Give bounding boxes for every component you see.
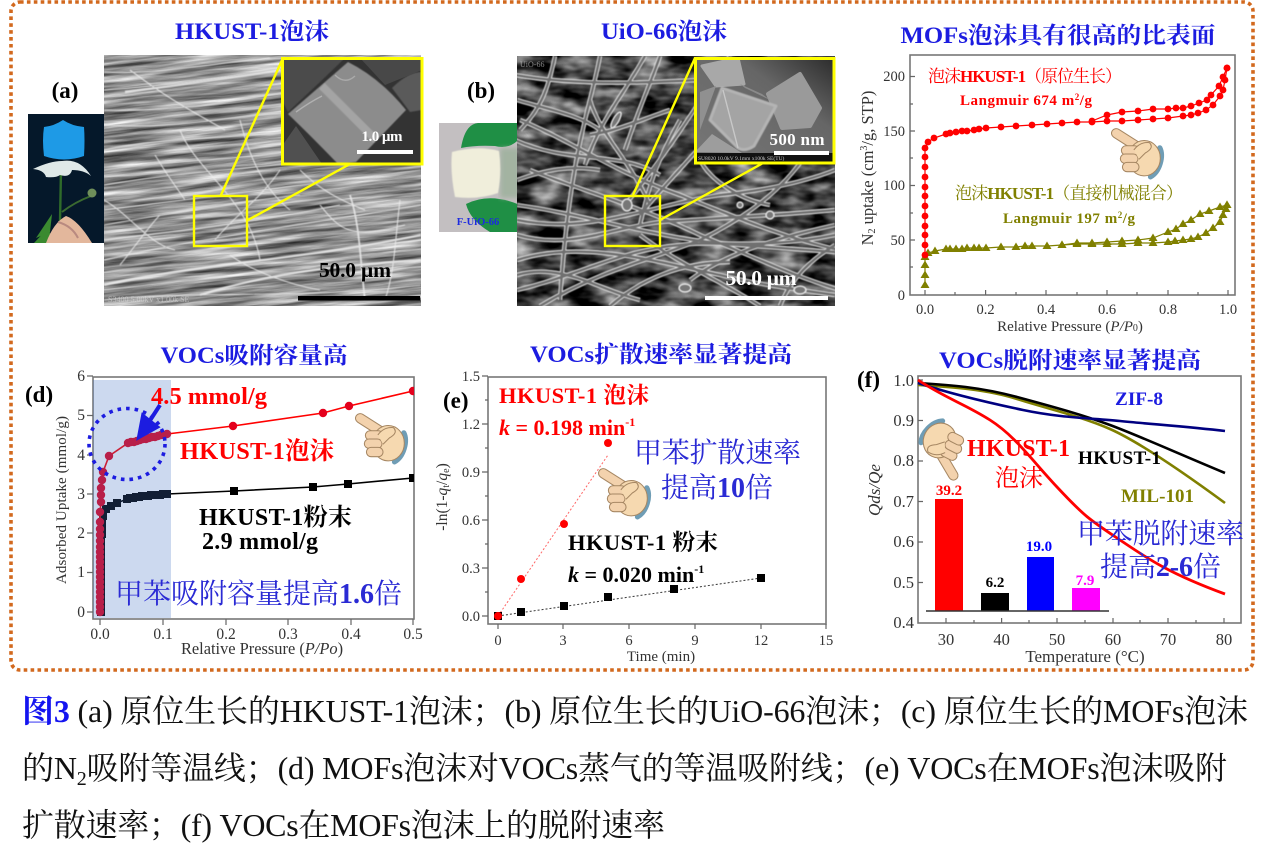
caption line 2: 的N xyxy=(22,750,77,786)
foam label: HKUST-1 xyxy=(967,436,1070,462)
icon: pointing hand xyxy=(360,418,405,462)
y axis numbers: 0 xyxy=(77,604,85,621)
label: Langmuir 674: /g xyxy=(1079,93,1092,109)
foam k value: k = 0.198 min xyxy=(499,415,625,440)
y axis numbers: 200 xyxy=(883,69,905,85)
caption line 2: 吸附等温线；(d) MOFs泡沫对VOCs蒸气的等温吸附线；(e) VOCs在MOFs泡沫吸附 xyxy=(87,750,1227,786)
y axis numbers: 4 xyxy=(77,447,85,464)
x axis numbers: 0.2 xyxy=(977,302,995,318)
x axis numbers: 0 xyxy=(494,633,502,649)
zoom lines xyxy=(633,58,763,220)
inset scale bar xyxy=(774,151,829,155)
y axis title: 2 xyxy=(867,228,878,233)
inset scale bar xyxy=(357,150,413,154)
heading: VOCs吸附容量高 xyxy=(160,342,348,368)
x axis numbers xyxy=(494,633,833,649)
caption line 1: 图3 (a) 原位生长的HKUST-1泡沫；(b) 原位生长的UiO-66泡沫；(c) 原位生长的MOFs泡沫 xyxy=(22,693,1248,729)
powder label: HKUST-1粉末 xyxy=(199,504,352,531)
label: Langmuir 674: Langmuir 674 m xyxy=(960,93,1074,109)
x axis numbers: 0.0 xyxy=(916,302,934,318)
y axis title: t xyxy=(441,485,452,488)
label: Langmuir 197: /g xyxy=(1122,211,1136,227)
x axis numbers: 0.8 xyxy=(1159,302,1177,318)
y axis title: e xyxy=(441,468,452,473)
y axis numbers: 0.9 xyxy=(893,411,914,430)
x axis numbers: 60 xyxy=(1105,630,1121,649)
heading: UiO-66 foam: UiO-66泡沫 xyxy=(601,19,727,44)
panel f: VOC desorption xyxy=(857,347,1244,666)
faint instrument text: S3400 5.00kV x1.00k SE xyxy=(108,295,190,304)
powder k value: k = 0.020 min xyxy=(568,562,694,587)
y axis numbers: 1.2 xyxy=(462,417,480,433)
outer dashed border xyxy=(11,2,1253,670)
y axis title: q xyxy=(434,473,451,481)
x axis numbers: 0.4 xyxy=(341,626,361,643)
powder value: 2.9 mmol/g xyxy=(202,529,318,555)
foam label: HKUST-1泡沫 xyxy=(180,438,334,465)
label: in-situ foam: 泡沫HKUST-1（原位生长） xyxy=(928,67,1122,86)
dotted circle xyxy=(89,408,165,480)
x axis numbers: 0.5 xyxy=(403,626,423,643)
callout: 1.6x capacity: 甲苯吸附容量提高1.6倍 xyxy=(115,578,402,610)
x axis title: Time (min) xyxy=(627,649,695,665)
heading: MOFs泡沫具有很高的比表面 xyxy=(900,23,1216,48)
inset: octahedral crystals xyxy=(695,58,834,163)
y axis title: Adsorbed Uptake (mmol/g) xyxy=(54,416,70,584)
label (a): (a) xyxy=(52,78,78,103)
label: Langmuir 197: 2 xyxy=(1118,210,1123,220)
ZIF-8 label: ZIF-8 xyxy=(1115,389,1163,410)
arrow xyxy=(139,405,160,437)
y axis numbers: 1.0 xyxy=(893,371,914,390)
callout line 2: 提高2-6倍 xyxy=(1100,551,1221,583)
x axis numbers: 15 xyxy=(819,633,833,649)
x axis numbers: 0.6 xyxy=(1098,302,1116,318)
photo: white foam with green gloves xyxy=(439,123,520,232)
y axis title: /g, STP) xyxy=(858,91,877,146)
caption xyxy=(22,693,1248,843)
x axis numbers: 1.0 xyxy=(1219,302,1237,318)
icon: pointing hand xyxy=(603,473,648,517)
label: Langmuir 674: 2 xyxy=(1075,92,1080,102)
x axis title: Relative Pressure (P/Po) xyxy=(181,639,343,658)
x axis numbers: 3 xyxy=(559,633,567,649)
ZIF-8 curve xyxy=(918,383,1225,431)
panel c: N2 isotherms xyxy=(858,23,1237,335)
bar value 19.0: 19.0 xyxy=(1026,539,1052,555)
icon: hand pointing down xyxy=(913,416,973,475)
faint instrument text: UiO-66 xyxy=(520,60,544,69)
x axis numbers xyxy=(938,630,1232,649)
x axis title: Relative Pressure (P/P0) xyxy=(997,319,1143,335)
inset data strip text: SU8020 10.0kV 9.1mm x100k SE(TU) xyxy=(698,155,785,162)
y axis title: / xyxy=(434,480,451,485)
panel d: VOC adsorption xyxy=(25,342,423,658)
zoom lines xyxy=(221,58,350,220)
x axis numbers: 0.1 xyxy=(153,626,173,643)
y axis numbers: 100 xyxy=(883,178,905,194)
x axis numbers: 0.2 xyxy=(216,626,236,643)
selection box xyxy=(194,196,247,246)
y axis title: N xyxy=(858,233,877,245)
photo: blue foam on flower xyxy=(28,114,105,243)
foam curve xyxy=(918,380,1225,594)
photo caption F-UiO-66: F-UiO-66 xyxy=(457,217,499,228)
powder label: HKUST-1 粉末 xyxy=(568,530,718,555)
y axis numbers: 0.5 xyxy=(893,573,914,592)
y axis numbers: 0.4 xyxy=(893,613,914,632)
x axis title: Temperature (°C) xyxy=(1025,647,1145,666)
y axis numbers: 2 xyxy=(77,525,85,542)
red isotherm xyxy=(925,68,1227,255)
x axis numbers xyxy=(90,626,423,643)
scale text 50.0 µm: 50.0 µm xyxy=(726,266,797,290)
inset bar chart xyxy=(926,483,1109,611)
y axis numbers: 5 xyxy=(77,407,85,424)
y axis numbers xyxy=(883,69,905,304)
fit lines xyxy=(498,455,761,616)
label (d): (d) xyxy=(25,382,53,407)
callout: 10x diffusion line 1: 甲苯扩散速率 xyxy=(634,437,801,469)
powder k value: -1 xyxy=(694,562,704,576)
y axis numbers: 50 xyxy=(890,233,905,249)
heading: VOCs脱附速率显著提高 xyxy=(939,347,1201,373)
powder label: HKUST-1 xyxy=(1078,448,1161,469)
heading: HKUST-1 foam: HKUST-1泡沫 xyxy=(175,19,329,44)
x axis numbers: 30 xyxy=(938,630,954,649)
label: mechanical mix foam: 泡沫HKUST-1（直接机械混合） xyxy=(955,184,1183,203)
foam data xyxy=(494,439,612,620)
inset: crystal SEM xyxy=(282,58,422,164)
panel e: VOC diffusion xyxy=(434,341,833,665)
foam label: HKUST-1 泡沫 xyxy=(499,383,649,408)
icon: pointing hand xyxy=(1116,133,1161,177)
y axis numbers: 0.6 xyxy=(893,532,914,551)
y axis numbers: 0.3 xyxy=(462,561,480,577)
HKUST-1 powder curve xyxy=(918,383,1225,473)
y axis numbers: 1 xyxy=(77,564,85,581)
y axis numbers xyxy=(462,369,480,625)
selection box xyxy=(605,196,660,246)
MIL-101 label: MIL-101 xyxy=(1121,486,1194,507)
foam label second line: 泡沫 xyxy=(995,465,1043,492)
panel a: HKUST-1 foam xyxy=(28,19,424,306)
y axis numbers: 1.5 xyxy=(462,369,480,385)
y axis title: 3 xyxy=(859,146,870,151)
label (e): (e) xyxy=(443,388,469,413)
SEM image: thick fibres xyxy=(515,56,840,306)
label: Langmuir 197: Langmuir 197 m xyxy=(1003,211,1117,227)
x axis numbers: 6 xyxy=(625,633,633,649)
foam k value: -1 xyxy=(625,415,635,429)
caption line 3: 扩散速率；(f) VOCs在MOFs泡沫上的脱附速率 xyxy=(22,807,665,843)
powder curve xyxy=(101,478,413,612)
y axis numbers: 3 xyxy=(77,486,85,503)
plot frame and ticks xyxy=(910,55,1235,295)
y axis numbers: 0.8 xyxy=(893,451,914,470)
MIL-101 curve xyxy=(918,385,1225,503)
caption line 2: 2 xyxy=(77,768,87,790)
y axis numbers: 0.0 xyxy=(462,609,480,625)
powder data xyxy=(494,574,765,620)
y axis title: uptake (cm xyxy=(858,150,877,228)
bar value 39.2: 39.2 xyxy=(936,483,962,499)
callout line 1: 甲苯脱附速率 xyxy=(1077,518,1244,550)
x axis numbers: 0.3 xyxy=(278,626,298,643)
y axis numbers xyxy=(77,368,85,621)
scale bar xyxy=(298,296,420,300)
x axis numbers: 50 xyxy=(1049,630,1065,649)
label (f): (f) xyxy=(857,367,880,392)
y axis numbers: 0.7 xyxy=(893,492,914,511)
foam curve xyxy=(100,391,413,612)
scale bar xyxy=(705,296,828,300)
plot frame and ticks xyxy=(87,376,414,625)
x axis numbers: 9 xyxy=(691,633,699,649)
bar value 6.2: 6.2 xyxy=(986,575,1004,591)
y axis title: ) xyxy=(434,463,451,468)
olive isotherm xyxy=(925,205,1227,285)
heading: VOCs扩散速率显著提高 xyxy=(530,341,792,367)
bar value 7.9: 7.9 xyxy=(1076,573,1094,589)
value 4.5 mmol/g: 4.5 mmol/g xyxy=(151,383,268,410)
scale text 50.0 µm: 50.0 µm xyxy=(319,258,391,282)
SEM image: fibrous foam xyxy=(104,55,421,306)
plot frame and ticks xyxy=(482,376,826,629)
callout: 10x diffusion line 2: 提高10倍 xyxy=(661,472,773,504)
x axis numbers: 0.0 xyxy=(90,626,110,643)
y axis numbers xyxy=(893,371,914,632)
shaded low-pressure region xyxy=(93,380,171,618)
y axis numbers: 6 xyxy=(77,368,85,385)
x axis numbers: 0.4 xyxy=(1037,302,1056,318)
y axis numbers: 0.9 xyxy=(462,465,480,481)
y axis title: Qds/Qe xyxy=(865,464,884,516)
panel b: UiO-66 foam xyxy=(439,19,840,306)
inset text 500 nm: 500 nm xyxy=(770,130,824,149)
inset text 1.0 µm: 1.0 µm xyxy=(362,129,403,145)
plot frame and ticks xyxy=(918,376,1241,623)
x axis numbers: 40 xyxy=(993,630,1010,649)
y axis numbers: 150 xyxy=(883,124,905,140)
inset data strip xyxy=(697,153,832,162)
y axis title: -ln(1-q xyxy=(434,488,451,531)
y axis numbers: 0.6 xyxy=(462,513,480,529)
x axis numbers xyxy=(916,302,1237,318)
label (b): (b) xyxy=(467,78,495,103)
x axis numbers: 70 xyxy=(1160,630,1176,649)
y axis numbers: 0 xyxy=(898,288,905,304)
x axis numbers: 80 xyxy=(1216,630,1232,649)
x axis numbers: 12 xyxy=(754,633,768,649)
